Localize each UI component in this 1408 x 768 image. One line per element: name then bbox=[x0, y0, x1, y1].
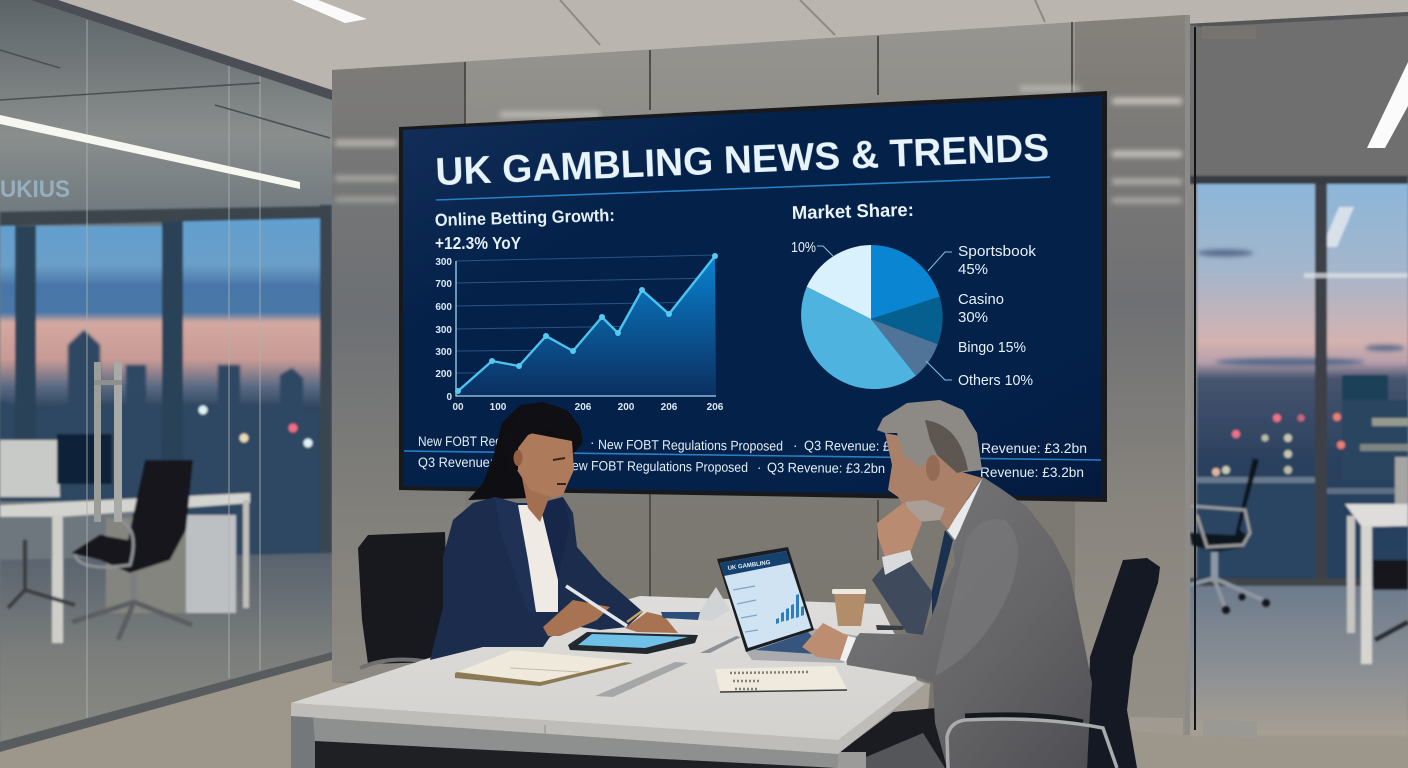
heading: online betting growth bbox=[435, 205, 615, 253]
glass reflections bbox=[0, 50, 330, 138]
ceiling light: left room bbox=[0, 115, 300, 189]
display frame bbox=[399, 91, 1107, 502]
left room floor bbox=[0, 553, 332, 742]
y axis labels: 200 bbox=[435, 369, 452, 380]
metal highlights bbox=[335, 86, 1182, 203]
heading: online betting growth: Online Betting Growth: bbox=[435, 205, 615, 230]
news ticker: Q3 Revenue: £3.2bn bbox=[767, 460, 885, 476]
stylus bbox=[566, 586, 627, 626]
right room floor bbox=[1190, 586, 1408, 736]
ear bbox=[514, 450, 522, 466]
axes bbox=[456, 261, 716, 396]
news ticker: New FOBT Regulations bbox=[418, 434, 543, 449]
laptop lid bbox=[717, 547, 814, 652]
y axis labels: 0 bbox=[446, 392, 452, 403]
jacket bbox=[845, 477, 1092, 768]
laptop screen bbox=[720, 551, 811, 648]
hair front bbox=[505, 403, 582, 470]
chair armrest bbox=[947, 715, 1117, 768]
door handle bbox=[94, 362, 122, 522]
pie labels: 30% bbox=[958, 309, 988, 326]
data points bbox=[455, 253, 718, 394]
news ticker: Revenue: £3.2bn bbox=[980, 465, 1084, 480]
bracelet bbox=[627, 611, 642, 622]
floor bbox=[0, 660, 1408, 768]
city bokeh lights bbox=[198, 406, 312, 448]
raised sleeve bbox=[872, 562, 933, 635]
pie labels bbox=[791, 239, 1037, 389]
second hand bbox=[625, 612, 678, 633]
left room chair bbox=[8, 460, 193, 640]
news ticker bbox=[418, 434, 1087, 480]
area fill bbox=[456, 256, 716, 396]
x axis labels: 206 bbox=[575, 402, 592, 413]
wall baseboard bbox=[1130, 717, 1183, 735]
chair: man bbox=[1087, 558, 1160, 768]
man bbox=[802, 400, 1092, 768]
title: UK GAMBLING NEWS & TRENDS bbox=[435, 126, 1050, 194]
phone on table bbox=[876, 625, 905, 630]
news ticker: · bbox=[793, 438, 798, 453]
left room windows bbox=[0, 218, 321, 555]
door floor patch bbox=[1203, 719, 1257, 738]
ceiling light: top bbox=[292, 0, 367, 23]
tie bbox=[932, 530, 953, 623]
table surface bbox=[291, 596, 917, 740]
right glass room bbox=[1185, 12, 1408, 738]
ticker divider bbox=[404, 451, 1101, 460]
city bokeh lights bbox=[1212, 413, 1408, 476]
woman bbox=[430, 402, 678, 660]
shirt cuff bbox=[882, 550, 913, 575]
right room chair bbox=[1190, 458, 1270, 614]
window frames bbox=[0, 205, 332, 555]
table edge bbox=[291, 680, 925, 754]
x axis labels: 200 bbox=[618, 402, 635, 413]
pie labels: 10% bbox=[791, 239, 816, 256]
pie labels: Bingo 15% bbox=[958, 339, 1026, 356]
y axis labels: 600 bbox=[435, 302, 452, 313]
wall bbox=[332, 15, 1190, 735]
blouse bbox=[518, 505, 558, 612]
glass door line bbox=[1194, 27, 1196, 730]
news ticker: · bbox=[757, 460, 762, 475]
cuff bbox=[840, 636, 856, 662]
pie labels: Casino bbox=[958, 291, 1004, 308]
shirt bbox=[947, 477, 985, 540]
neck bbox=[522, 478, 550, 522]
table frame and legs bbox=[291, 715, 315, 768]
face bbox=[513, 433, 574, 498]
table inlay strips bbox=[595, 662, 688, 697]
eyes and lips bbox=[553, 458, 566, 484]
hair back bbox=[468, 402, 583, 500]
x axis labels: 206 bbox=[661, 402, 678, 413]
x axis labels bbox=[452, 402, 724, 413]
right room ceiling bbox=[1185, 12, 1408, 178]
heading: online betting growth: +12.3% YoY bbox=[435, 233, 521, 253]
news ticker: New FOBT Regulations Proposed bbox=[598, 437, 783, 454]
news ticker: Q3 Revenue: £3.2bn bbox=[418, 455, 536, 470]
y axis labels: 300 bbox=[435, 347, 452, 358]
chair: woman bbox=[358, 532, 448, 762]
door closer bbox=[1202, 26, 1256, 39]
news ticker: · bbox=[590, 435, 594, 450]
pie labels: 45% bbox=[958, 261, 988, 278]
ceiling bbox=[0, 0, 1408, 110]
title rule bbox=[436, 177, 1050, 200]
table bbox=[291, 596, 925, 768]
back laptop bbox=[661, 587, 730, 621]
news ticker: Q3 Revenue: £3.2bn bbox=[804, 438, 922, 454]
left notebook bbox=[455, 650, 633, 686]
x axis labels: 00 bbox=[452, 402, 464, 413]
laptop bbox=[717, 547, 880, 663]
ceiling light: right room bbox=[1367, 62, 1408, 148]
arm shading bbox=[935, 519, 1018, 676]
lapels bbox=[495, 497, 538, 612]
right notebook bbox=[715, 666, 847, 692]
laptop: UK GAMBLING bbox=[727, 560, 771, 572]
neck and face bbox=[885, 433, 982, 530]
ear bbox=[926, 455, 940, 481]
right room desk bbox=[1345, 457, 1408, 664]
hand at chin bbox=[877, 503, 922, 563]
window reflections bbox=[1327, 207, 1354, 247]
jacket bbox=[430, 497, 643, 660]
y axis labels: 300 bbox=[435, 325, 452, 336]
y axis labels: 300 bbox=[435, 257, 452, 268]
heading: market share: Market Share: bbox=[792, 199, 914, 223]
glass bottom frame bbox=[0, 652, 332, 752]
trend line bbox=[458, 256, 715, 391]
pie chart bbox=[801, 245, 952, 389]
y axis labels: 700 bbox=[435, 279, 452, 290]
news ticker: New FOBT Regulations Proposed bbox=[563, 458, 748, 475]
display surface bbox=[403, 96, 1102, 497]
man: lower body bbox=[840, 680, 950, 768]
coffee cup bbox=[832, 589, 866, 626]
pie labels: Sportsbook bbox=[958, 243, 1037, 260]
x axis labels: 206 bbox=[707, 402, 724, 413]
left room desk bbox=[0, 434, 250, 643]
laptop base bbox=[745, 628, 880, 663]
left glass room bbox=[0, 0, 332, 752]
glass top beam bbox=[30, 0, 332, 100]
right room skyline bbox=[1197, 375, 1408, 577]
hand on laptop bbox=[802, 623, 850, 660]
under table shadow bbox=[315, 735, 838, 768]
beard stubble bbox=[905, 500, 945, 522]
clouds bbox=[1197, 250, 1405, 366]
hair bbox=[877, 400, 982, 473]
tablet bbox=[568, 632, 698, 654]
news ticker: Revenue: £3.2bn bbox=[981, 441, 1087, 456]
hand holding stylus bbox=[543, 600, 610, 636]
wall display bbox=[399, 91, 1107, 502]
reflection text: UKIUS bbox=[0, 176, 70, 203]
x axis labels: 100 bbox=[490, 402, 507, 413]
y axis labels bbox=[435, 257, 452, 403]
line chart bbox=[435, 253, 724, 413]
pie labels: Others 10% bbox=[958, 372, 1033, 389]
laptop bar chart bbox=[776, 594, 804, 624]
left room skyline bbox=[0, 330, 320, 555]
